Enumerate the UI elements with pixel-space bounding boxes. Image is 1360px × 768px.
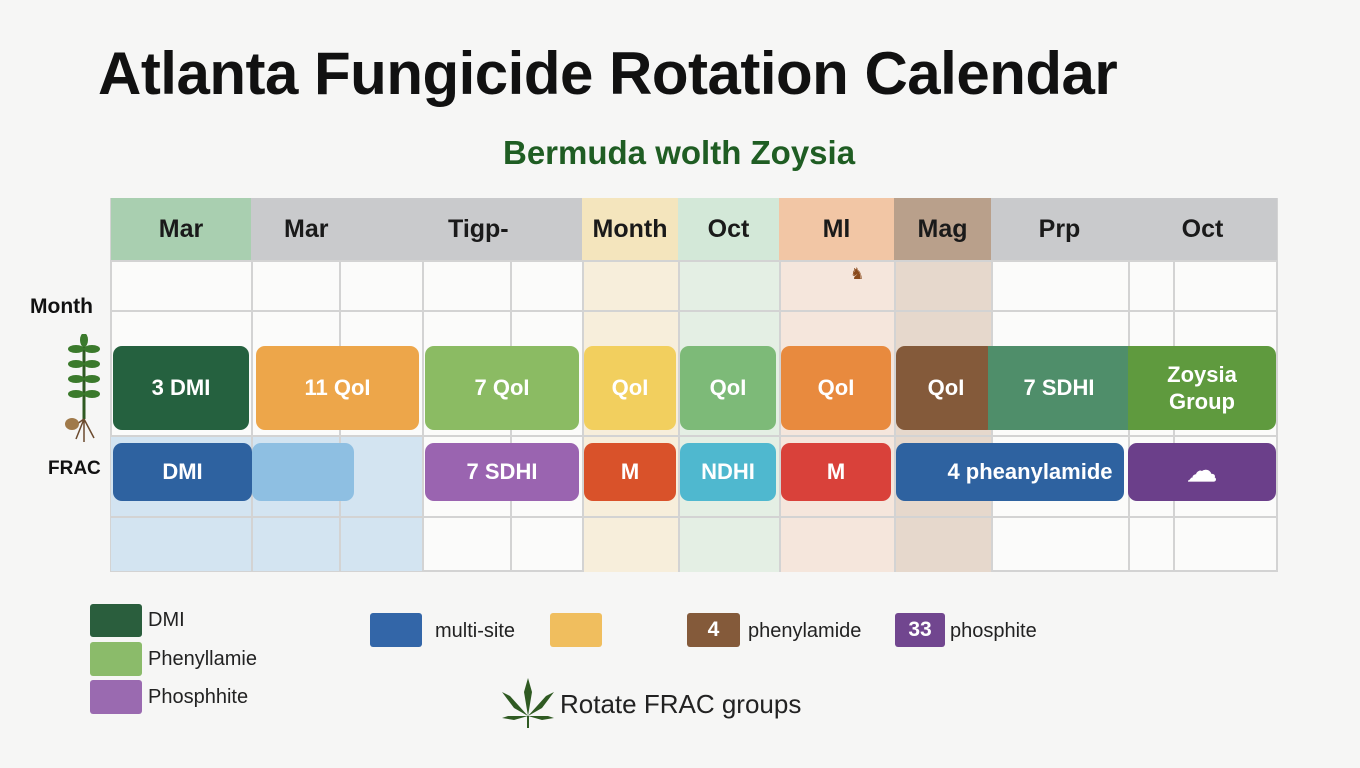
calendar grid: M bbox=[827, 459, 845, 484]
calendar grid: 7 SDHI bbox=[1024, 375, 1094, 400]
legend: multi-site bbox=[435, 620, 515, 642]
legend: Phosphhite bbox=[148, 686, 248, 708]
row label: FRAC: FRAC bbox=[48, 458, 101, 479]
calendar grid: 11 QoI bbox=[304, 375, 371, 400]
calendar grid: Oct bbox=[708, 214, 749, 242]
icon: plant bbox=[65, 334, 100, 442]
calendar grid bbox=[110, 198, 1278, 572]
calendar grid: Tigp- bbox=[448, 214, 509, 242]
legend: 33 bbox=[908, 618, 932, 641]
calendar grid: Zoysia bbox=[1167, 362, 1237, 386]
calendar grid: 7 QoI bbox=[474, 375, 530, 400]
calendar grid: 3 DMI bbox=[152, 375, 210, 400]
calendar grid: Group bbox=[1169, 389, 1235, 414]
calendar grid: NDHI bbox=[701, 459, 755, 484]
legend: phenylamide bbox=[748, 620, 861, 642]
calendar grid: M bbox=[621, 459, 639, 484]
calendar grid: QoI bbox=[928, 375, 964, 400]
calendar grid: Mag bbox=[918, 214, 968, 242]
calendar grid: Oct bbox=[1182, 214, 1223, 242]
legend: 4 bbox=[708, 618, 719, 641]
calendar grid: Ml bbox=[823, 214, 850, 242]
calendar grid: QoI bbox=[710, 375, 746, 400]
legend bbox=[90, 604, 1037, 714]
calendar grid: DMI bbox=[162, 459, 203, 484]
subtitle: Bermuda wolth Zoysia bbox=[503, 134, 855, 171]
calendar grid: Month bbox=[593, 214, 667, 242]
calendar grid: Prp bbox=[1039, 214, 1080, 242]
calendar grid: QoI bbox=[818, 375, 854, 400]
title: Atlanta Fungicide Rotation Calendar bbox=[98, 40, 1117, 107]
calendar grid: 4 pheanylamide bbox=[947, 459, 1113, 484]
calendar grid: 7 SDHI bbox=[467, 459, 537, 484]
small bug icon: ♞ bbox=[850, 266, 864, 283]
calendar grid: QoI bbox=[612, 375, 648, 400]
header row: months bbox=[111, 198, 1277, 260]
row label: Month: Month bbox=[30, 295, 93, 318]
legend: DMI bbox=[148, 609, 185, 631]
calendar grid: Mar bbox=[159, 214, 203, 242]
calendar grid: Mar bbox=[284, 214, 328, 242]
footer note: Rotate FRAC groups bbox=[560, 689, 801, 719]
icon: leaf bbox=[502, 678, 554, 728]
legend: Phenyllamie bbox=[148, 648, 257, 670]
calendar grid: ☁ bbox=[1187, 455, 1217, 488]
row 2 pills bbox=[113, 443, 1276, 501]
legend: phosphite bbox=[950, 620, 1037, 642]
row 1 pills bbox=[113, 346, 1276, 430]
